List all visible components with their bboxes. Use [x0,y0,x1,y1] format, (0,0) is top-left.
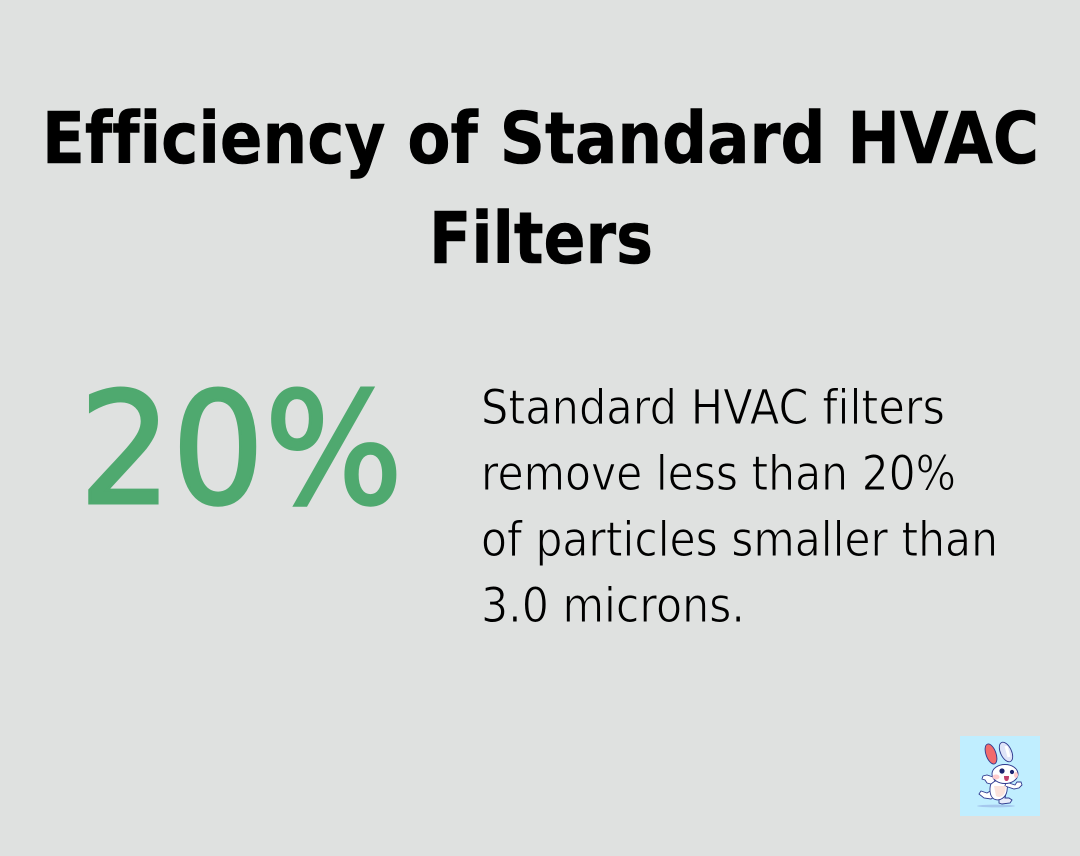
title [42,97,1039,280]
description text [481,380,998,634]
description text: of particles smaller than [481,512,998,568]
title: Filters [429,197,653,280]
big statistic: 20%: 20% [79,359,403,540]
rabbit body [979,764,1022,804]
description text: Standard HVAC filters [481,380,945,436]
description text: remove less than 20% [481,446,956,502]
rabbit face [992,768,1018,797]
icon: rabbit logo [960,736,1040,816]
description text: 3.0 microns. [481,578,745,634]
rabbit ears [983,740,1015,766]
